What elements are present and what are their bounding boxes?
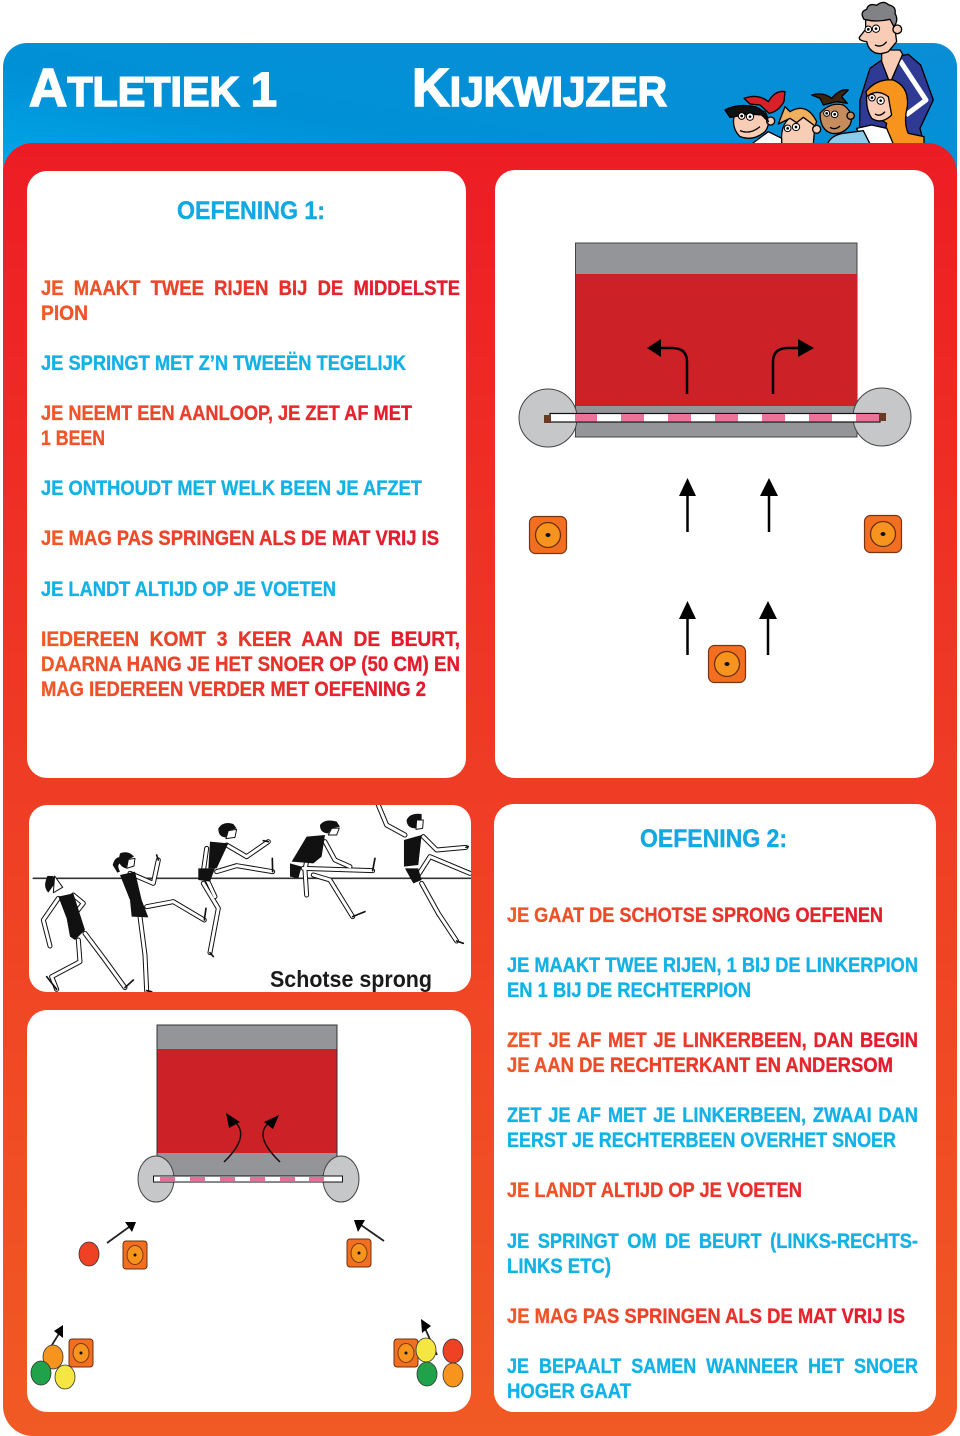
arrow: turn right [773, 339, 814, 394]
panel: oefening 1 text [27, 171, 466, 778]
title: Atletiek 1: ATLETIEK 1 [29, 58, 277, 118]
instruction lines 1: DAARNA HANG JE HET SNOER OP (50 CM) EN [41, 652, 460, 676]
panel: oefening 1 diagram [495, 170, 934, 778]
instruction lines 1: JE ONTHOUDT MET WELK BEEN JE AFZET [41, 476, 422, 500]
header band [3, 43, 957, 203]
heading: oefening 1: OEFENING 1: [177, 197, 325, 225]
instruction lines 1: JE NEEMT EEN AANLOOP, JE ZET AF MET [41, 401, 412, 425]
panel: schotse sprong photo [29, 805, 471, 992]
standards and bar [138, 1156, 359, 1202]
instruction lines 2: JE LANDT ALTIJD OP JE VOETEN [507, 1178, 802, 1202]
cones [530, 516, 902, 682]
instruction lines 1: JE MAG PAS SPRINGEN ALS DE MAT VRIJ IS [41, 526, 439, 550]
panel: oefening 2 text [494, 804, 936, 1412]
child with red cap [725, 91, 785, 144]
instruction lines 2: EERST JE RECHTERBEEN OVERHET SNOER [507, 1128, 896, 1152]
instruction lines 2 [507, 903, 918, 1403]
instruction lines 1: JE SPRINGT MET Z’N TWEEËN TEGELIJK [41, 351, 406, 375]
girl [857, 80, 924, 144]
instruction lines 1: PION [41, 301, 88, 325]
instruction lines 2: HOGER GAAT [507, 1379, 631, 1403]
heading: oefening 2: OEFENING 2: [640, 825, 787, 853]
caption: Schotse sprong [270, 966, 432, 992]
arrows to bar [47, 1220, 437, 1355]
feet and hands [47, 841, 468, 992]
child with blond hair [778, 107, 821, 144]
teacher [859, 2, 933, 144]
instruction lines 1 [41, 276, 460, 701]
players [31, 1242, 463, 1389]
panel: oefening 2 diagram [27, 1010, 471, 1412]
instruction lines 1: MAG IEDEREEN VERDER MET OEFENING 2 [41, 677, 426, 701]
mat [157, 1025, 337, 1178]
athlete sequence [33, 805, 471, 992]
instruction lines 1: JE MAAKT TWEE RIJEN BIJ DE MIDDELSTE [41, 276, 460, 300]
instruction lines 1: IEDEREEN KOMT 3 KEER AAN DE BEURT, [41, 627, 460, 651]
instruction lines 2: JE GAAT DE SCHOTSE SPRONG OEFENEN [507, 903, 883, 927]
instruction lines 2: EN 1 BIJ DE RECHTERPION [507, 978, 751, 1002]
illustration: teacher and children [725, 2, 933, 144]
child with brown face [812, 90, 870, 144]
high jump standards and bar [519, 388, 911, 447]
instruction lines 2: LINKS ETC) [507, 1254, 611, 1278]
torsos and heads [45, 814, 423, 940]
arrows: run-up [679, 478, 778, 655]
instruction lines 1: 1 BEEN [41, 426, 105, 450]
title: Kijkwijzer: KIJKWIJZER [412, 58, 667, 118]
cones [69, 1239, 418, 1367]
instruction lines 2: JE MAG PAS SPRINGEN ALS DE MAT VRIJ IS [507, 1304, 905, 1328]
mat [576, 243, 857, 437]
limbs outline [43, 805, 470, 991]
instruction lines 2: JE AAN DE RECHTERKANT EN ANDERSOM [507, 1053, 893, 1077]
arrow: turn left [647, 339, 687, 394]
curved arrows on mat [224, 1113, 280, 1162]
instruction lines 1: JE LANDT ALTIJD OP JE VOETEN [41, 577, 336, 601]
